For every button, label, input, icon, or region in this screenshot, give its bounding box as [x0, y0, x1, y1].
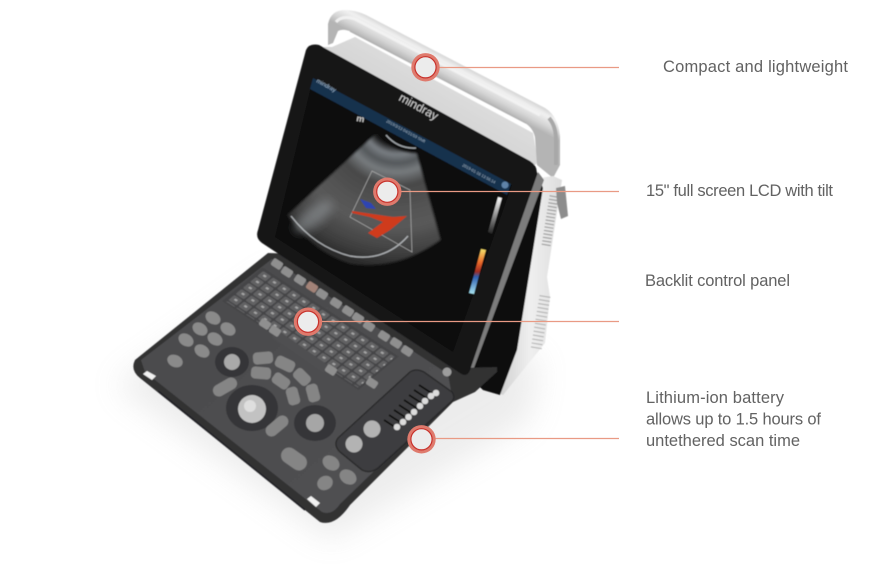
grey scale bar	[488, 197, 502, 234]
ultrasound sector image	[287, 132, 441, 266]
label: battery: untethered scan time	[646, 432, 800, 450]
ultrasound device	[133, 10, 568, 523]
label: control panel: Backlit control panel	[645, 272, 790, 290]
rear body	[498, 176, 568, 395]
blue header band: mindray	[315, 78, 337, 94]
ground shadow	[115, 270, 540, 540]
monitor branding: m	[356, 113, 365, 124]
keyboard base	[133, 253, 497, 523]
monitor branding: 2019/3/13 04/31/59 Shift	[386, 118, 427, 144]
label: compact and lightweight: Compact and lightweight	[663, 58, 848, 76]
monitor branding	[356, 90, 497, 185]
rear black hinge wedge	[467, 170, 544, 395]
callout marker: control panel	[294, 308, 322, 336]
small hinge button	[442, 368, 452, 376]
arc buttons	[211, 351, 359, 493]
label: battery: allows up to 1.5 hours of	[646, 410, 821, 428]
callout marker: screen	[373, 178, 401, 206]
callout lines	[321, 68, 619, 438]
left control buttons	[165, 309, 238, 370]
colour scale bar	[469, 249, 486, 294]
white edge labels	[143, 371, 320, 507]
tilted LCD monitor	[257, 45, 537, 375]
function keys	[258, 258, 414, 389]
slider panel	[336, 370, 454, 472]
colour flow box	[350, 171, 412, 252]
knobs and trackball	[215, 347, 336, 441]
monitor branding: 2019-01-18 13:56:14	[462, 162, 497, 185]
callout marker: handle	[411, 53, 440, 82]
label: LCD screen: 15" full screen LCD with tilt	[646, 182, 833, 200]
display area	[275, 78, 512, 352]
label: battery: Lithium-ion battery	[646, 389, 785, 407]
handle	[315, 10, 560, 178]
keyboard key grid	[222, 268, 399, 390]
blue header band	[310, 78, 511, 195]
callout marker: battery	[407, 425, 436, 453]
monitor branding: mindray	[397, 90, 441, 123]
